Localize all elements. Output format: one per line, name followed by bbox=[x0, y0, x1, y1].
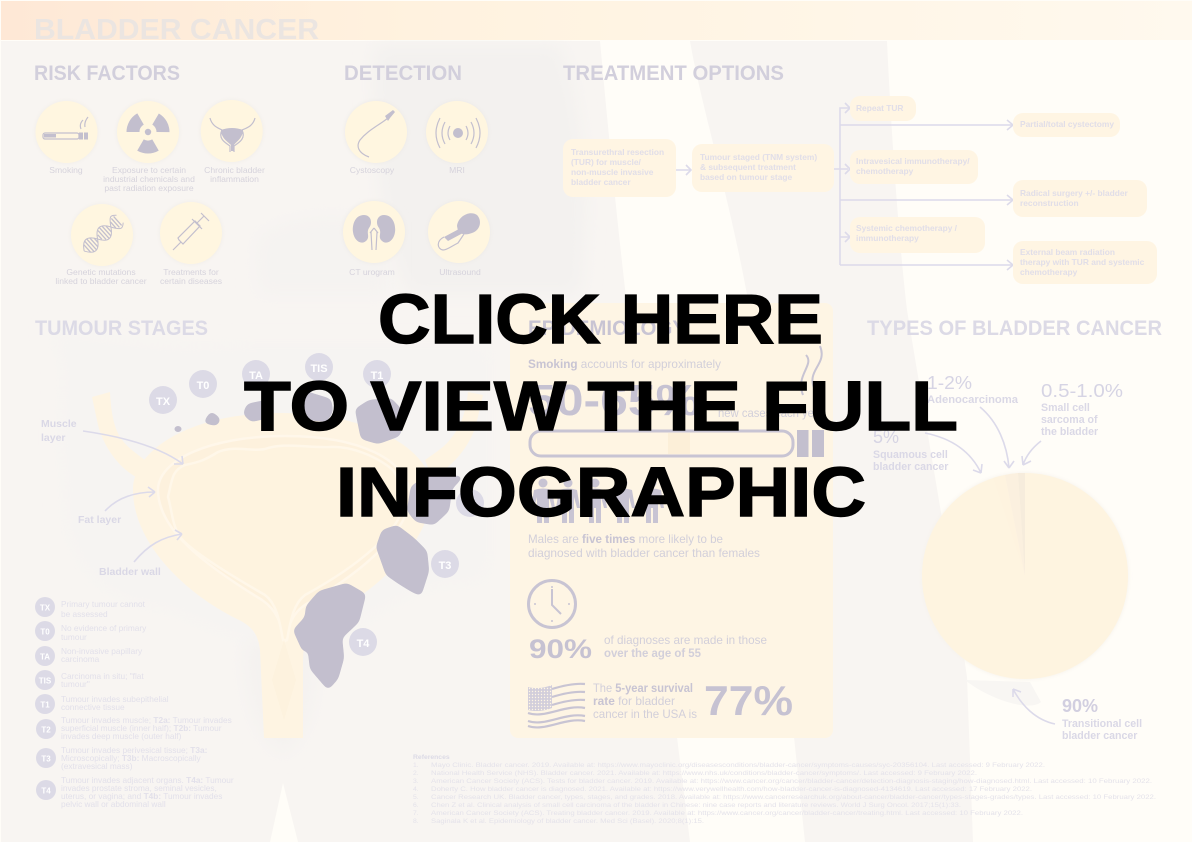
call to action overlay bbox=[244, 280, 958, 531]
stage badge T2 bbox=[456, 489, 484, 517]
heading: risk factors: RISK FACTORS bbox=[34, 62, 180, 85]
legend T2: invades deep muscle (outer half) bbox=[61, 731, 182, 741]
option: radiation: chemotherapy bbox=[1020, 267, 1078, 277]
legend T1: connective tissue bbox=[61, 702, 125, 712]
label: transitional: bladder cancer bbox=[1062, 730, 1137, 742]
legend T4: uterus, or vagina; and T4b: Tumour invades bbox=[61, 791, 222, 801]
flow arrows bbox=[676, 103, 1013, 270]
legend T2: T2 bbox=[41, 726, 51, 734]
legend T3: Tumour invades perivesical tissue; T3a: bbox=[61, 745, 207, 755]
step: TUR: bladder cancer bbox=[571, 177, 631, 187]
option: repeat TUR: Repeat TUR bbox=[856, 103, 903, 113]
option: intravesical: Intravesical immunotherapy/ bbox=[856, 156, 970, 166]
stage badge TIS: TIS bbox=[310, 363, 328, 375]
label: muscle layer: layer bbox=[41, 432, 66, 444]
icon: smoking bbox=[36, 101, 98, 163]
stat caption: age: of diagnoses are made in those bbox=[604, 634, 767, 647]
option: radiation bbox=[1013, 241, 1157, 284]
option: radical surgery bbox=[1013, 180, 1147, 217]
legend TA: Non-invasive papillary bbox=[61, 646, 143, 656]
label: squamous bbox=[873, 427, 948, 473]
references: Mayo Clinic. Bladder cancer. 2019. Available at: https://www.mayoclinic.org/diseasesconditions/bladder-cancer/symptoms-causes/syc-20356104. Last accessed: 9 February 2022. bbox=[431, 762, 1045, 769]
references bbox=[413, 754, 1156, 825]
urethra detail bbox=[272, 640, 296, 720]
heading: epidemiology: EPIDEMIOLOGY bbox=[528, 317, 686, 340]
heading: detection: DETECTION bbox=[344, 62, 462, 85]
tumour TIS bbox=[300, 391, 333, 422]
label: bladder wall: Bladder wall bbox=[99, 566, 161, 578]
stage badge TA: TA bbox=[249, 370, 263, 382]
stage badge T0: T0 bbox=[197, 380, 209, 392]
icon: ultrasound bbox=[428, 201, 490, 263]
label: adenocarcinoma bbox=[927, 373, 1018, 406]
caption: MRI: MRI bbox=[449, 165, 465, 175]
references: 5. bbox=[413, 794, 419, 801]
call to action overlay: TO VIEW THE FULL bbox=[244, 367, 958, 445]
tumour TX bbox=[174, 426, 182, 432]
tumour T0 bbox=[203, 411, 221, 426]
legend T4: pelvic wall or abdominal wall bbox=[61, 799, 166, 809]
stat: survival caption: cancer in the USA is bbox=[593, 708, 697, 721]
heading: types of bladder cancer: TYPES OF BLADDER CANCER bbox=[867, 317, 1162, 340]
caption: treatments bbox=[160, 267, 222, 286]
label: squamous: bladder cancer bbox=[873, 461, 948, 473]
ureters bbox=[92, 392, 483, 478]
label: fat layer: Fat layer bbox=[78, 514, 121, 526]
label: small cell: the bladder bbox=[1041, 426, 1098, 438]
label: squamous: 5% bbox=[873, 427, 899, 447]
option: intravesical bbox=[850, 150, 978, 184]
stat: smoking: Smoking accounts for approximately bbox=[528, 358, 721, 371]
label: adenocarcinoma: 1-2% bbox=[927, 373, 972, 393]
tumour T2 bbox=[407, 475, 464, 525]
icon: kidneys bbox=[343, 201, 405, 263]
legend TIS: tumour" bbox=[61, 679, 90, 689]
step: TUR: (TUR) for muscle/ bbox=[571, 157, 641, 167]
stage badge T3 bbox=[431, 550, 459, 578]
references: National Health Service (NHS). Bladder cancer. 2021. Available at: https://www.nhs.uk/conditions/bladder-cancer/symptoms/. Last accessed: 9 February 2022. bbox=[431, 770, 977, 777]
legend T0 bbox=[35, 621, 147, 642]
label: small cell bbox=[1041, 381, 1123, 438]
bladder lumen bbox=[168, 446, 402, 640]
tumour T4 bbox=[293, 583, 366, 690]
legend T3: T3 bbox=[41, 754, 51, 764]
legend TIS: Carcinoma in situ; "flat bbox=[61, 671, 144, 681]
legend T3: (extravesical mass) bbox=[61, 761, 133, 771]
step: TUR bbox=[563, 139, 676, 197]
legend TIS: TIS bbox=[39, 676, 52, 686]
stat: survival caption bbox=[593, 682, 697, 721]
references: 8. bbox=[413, 818, 419, 825]
legend T2: superficial muscle (inner half); T2b: Tumour bbox=[61, 723, 222, 733]
label: muscle layer: Muscle bbox=[41, 418, 77, 430]
icon: syringe bbox=[160, 202, 222, 264]
label: transitional: Transitional cell bbox=[1062, 718, 1142, 730]
option: cystectomy bbox=[1013, 113, 1120, 137]
caption: chemicals: Exposure to certain bbox=[112, 165, 186, 175]
label: small cell: Small cell bbox=[1041, 402, 1090, 414]
stat: males: diagnosed with bladder cancer than females bbox=[528, 547, 760, 560]
stat caption: age bbox=[604, 634, 767, 660]
option: radiation: External beam radiation bbox=[1020, 247, 1115, 257]
caption: treatments: Treatments for bbox=[163, 267, 219, 277]
arrow: adenocarcinoma bbox=[980, 407, 1014, 468]
option: systemic bbox=[850, 217, 985, 253]
step: staging: based on tumour stage bbox=[700, 172, 792, 182]
references: 2. bbox=[413, 770, 419, 777]
references: Doherty C. How bladder cancer is diagnosed. 2021. Available at: https://www.verywellhealth.com/how-bladder-cancer-is-diagnosed-4134619. Last accessed: 17 February 2022. bbox=[431, 786, 1032, 793]
step: TUR: Transurethral resection bbox=[571, 147, 664, 157]
flowchart: treatment options bbox=[563, 96, 1157, 284]
heading: tumour stages: TUMOUR STAGES bbox=[35, 317, 208, 340]
tumour T1 bbox=[355, 398, 405, 444]
step: staging: Tumour staged (TNM system) bbox=[700, 152, 817, 162]
icon: large cigarette bbox=[530, 430, 824, 457]
stat: males bbox=[528, 533, 760, 560]
icon: MRI bbox=[426, 101, 488, 163]
caption: chemicals: past radiation exposure bbox=[104, 183, 194, 193]
stat number: 77%: 77% bbox=[704, 677, 793, 724]
stage badge T3: T3 bbox=[439, 560, 451, 572]
stat number: 90%: 90% bbox=[529, 634, 592, 664]
legend T4: invades prostate stroma, seminal vesicles, bbox=[61, 783, 217, 793]
panel: epidemiology bbox=[510, 303, 833, 738]
legend TX: TX bbox=[40, 604, 51, 612]
legend T4: Tumour invades adjacent organs. T4a: Tumour bbox=[61, 775, 234, 785]
icon: radiation bbox=[117, 101, 179, 163]
option: radical surgery: reconstruction bbox=[1020, 198, 1079, 208]
label: adenocarcinoma: Adenocarcinoma bbox=[927, 394, 1018, 406]
bladder wall bbox=[133, 413, 432, 738]
legend TA: carcinoma bbox=[61, 654, 100, 664]
stage badge TIS bbox=[305, 353, 333, 381]
legend T2: Tumour invades muscle; T2a: Tumour invades bbox=[61, 715, 232, 725]
caption: cystoscopy: Cystoscopy bbox=[350, 165, 395, 175]
slice: squamous bbox=[993, 475, 1025, 576]
legend TIS bbox=[35, 670, 144, 690]
header band bbox=[1, 1, 1192, 40]
step: staging bbox=[692, 144, 834, 192]
stage badge T4: T4 bbox=[357, 638, 370, 650]
references: References bbox=[413, 754, 450, 761]
label: small cell: sarcoma of bbox=[1041, 414, 1098, 426]
caption: chemicals: industrial chemicals and bbox=[103, 174, 195, 184]
label: transitional: 90% bbox=[1062, 696, 1098, 716]
panel: detection bbox=[343, 101, 490, 277]
references: Saginala K et al. Epidemiology of bladder cancer. Med Sci (Basel). 2020;8(1):15. bbox=[431, 818, 704, 825]
option: radiation: therapy with TUR and systemic bbox=[1020, 257, 1145, 267]
references: 6. bbox=[413, 802, 419, 809]
icon: bladder bbox=[201, 100, 263, 162]
legend T0: No evidence of primary bbox=[61, 623, 147, 633]
legend T4 bbox=[36, 775, 234, 809]
icon: US flag bbox=[528, 684, 585, 727]
option: repeat TUR bbox=[850, 96, 916, 121]
references: American Cancer Society (ACS). Tests for bladder cancer. 2019. Available at: https://www.cancer.org/cancer/bladder-cancer/detection-diagnosis-staging/how-diagnosed.html. Last accessed: 10 February 2022. bbox=[431, 778, 1152, 785]
stage badge T2: T2 bbox=[464, 499, 476, 511]
legend T1: Tumour invades subepithelial bbox=[61, 694, 169, 704]
label: transitional bbox=[1062, 696, 1142, 742]
references: 3. bbox=[413, 778, 419, 785]
stat: males: Males are five times more likely to be bbox=[528, 533, 723, 546]
arrow: small cell bbox=[1022, 441, 1041, 465]
title: BLADDER CANCER bbox=[34, 14, 319, 46]
slice: small cell bbox=[1018, 473, 1025, 576]
legend T1: T1 bbox=[40, 700, 50, 710]
arrow: transitional bbox=[1013, 689, 1055, 724]
arrow: muscle layer bbox=[83, 431, 183, 464]
stat: survival caption: The 5-year survival bbox=[593, 682, 693, 695]
stage badge TX: TX bbox=[156, 396, 171, 408]
muscle layer bbox=[158, 436, 410, 642]
references: 4. bbox=[413, 786, 419, 793]
arrow: squamous bbox=[925, 433, 982, 473]
caption: inflammation: inflammation bbox=[210, 174, 259, 184]
caption: genetic: Genetic mutations bbox=[66, 267, 136, 277]
option: intravesical: chemotherapy bbox=[856, 166, 914, 176]
legend TX: Primary tumour cannot bbox=[61, 599, 146, 609]
caption: inflammation: Chronic bladder bbox=[204, 165, 265, 175]
caption: ultrasound: Ultrasound bbox=[439, 267, 481, 277]
heading: treatment options: TREATMENT OPTIONS bbox=[563, 62, 784, 85]
caption: CT urogram: CT urogram bbox=[349, 267, 395, 277]
legend TA: TA bbox=[40, 652, 50, 662]
legend T3 bbox=[36, 745, 207, 771]
arrow: bladder wall bbox=[134, 530, 182, 562]
stat: survival caption: rate for bladder bbox=[593, 695, 675, 708]
label: squamous: Squamous cell bbox=[873, 449, 948, 461]
stage badge T4 bbox=[349, 628, 377, 656]
legend: tumour stage definitions bbox=[35, 597, 234, 809]
stage badge TA bbox=[242, 360, 270, 388]
references: American Cancer Society (ACS). Treating bladder cancer. 2019. Available at: https://www.cancer.org/cancer/bladder-cancer/treating.html. Last accessed: 10 February 2022. bbox=[431, 810, 1023, 817]
caption: treatments: certain diseases bbox=[160, 276, 222, 286]
stat caption: new cases: new cases each year bbox=[718, 407, 824, 420]
stage badge T1 bbox=[363, 360, 391, 388]
stat caption: age: over the age of 55 bbox=[604, 647, 702, 660]
option: radical surgery: Radical surgery +/- bladder bbox=[1020, 188, 1128, 198]
stage badge TX bbox=[149, 386, 177, 414]
icon: people bbox=[531, 478, 664, 523]
step: staging: & subsequent treatment bbox=[700, 162, 796, 172]
legend T0: tumour bbox=[61, 632, 87, 642]
legend TX bbox=[35, 597, 146, 619]
chart: types pie bbox=[922, 473, 1128, 679]
legend T3: Microscopically; T3b: Macroscopically bbox=[61, 753, 202, 763]
legend T2 bbox=[36, 715, 232, 741]
diagram: bladder bbox=[41, 353, 484, 738]
label: small cell: 0.5-1.0% bbox=[1041, 381, 1123, 401]
references: 7. bbox=[413, 810, 419, 817]
caption: smoking: Smoking bbox=[49, 165, 83, 175]
icon: cystoscopy bbox=[345, 101, 407, 163]
stage badge T0 bbox=[189, 370, 217, 398]
label: muscle layer bbox=[41, 418, 77, 444]
stage badge T1: T1 bbox=[371, 370, 383, 382]
stat number: 50-65%: 50-65% bbox=[528, 376, 700, 425]
references: 1. bbox=[413, 762, 419, 769]
option: cystectomy: Partial/total cystectomy bbox=[1020, 119, 1114, 129]
icon: clock bbox=[528, 580, 576, 628]
arrow: fat layer bbox=[105, 487, 155, 511]
caption: inflammation bbox=[204, 165, 265, 184]
caption: genetic bbox=[55, 267, 147, 286]
legend TX: be assessed bbox=[61, 609, 108, 619]
caption: chemicals bbox=[103, 165, 195, 193]
slice: adenocarcinoma bbox=[1005, 473, 1025, 576]
legend T0: T0 bbox=[40, 628, 50, 636]
references: Cancer Research UK. Bladder cancer, types, stages, and grades. 2018. Available at: https://www.cancerresearchuk.org/about-cancer/bladder-cancer/types-stages-grades/types. Last accessed: 10 February 2022. bbox=[431, 794, 1156, 801]
legend T1 bbox=[35, 694, 169, 714]
tumour T3 bbox=[376, 525, 429, 596]
references: Chen Z et al. Clinical analysis of small cell carcinoma of the bladder in Chinese: nine case reports and literature reviews. World J Surg Oncol. 2017;15(1):33. bbox=[431, 802, 961, 809]
panel: risk factors bbox=[36, 100, 265, 286]
step: TUR: non-muscle invasive bbox=[571, 167, 654, 177]
legend T4: T4 bbox=[41, 786, 51, 796]
icon: DNA bbox=[71, 204, 133, 266]
call to action overlay: CLICK HERE bbox=[378, 280, 823, 358]
tumour TA bbox=[243, 400, 268, 422]
caption: genetic: linked to bladder cancer bbox=[55, 276, 147, 286]
legend TA bbox=[35, 646, 143, 666]
option: systemic: Systemic chemotherapy / bbox=[856, 223, 958, 233]
call to action overlay: INFOGRAPHIC bbox=[336, 453, 866, 531]
option: systemic: immunotherapy bbox=[856, 233, 919, 243]
icon: smoke bbox=[801, 346, 822, 395]
